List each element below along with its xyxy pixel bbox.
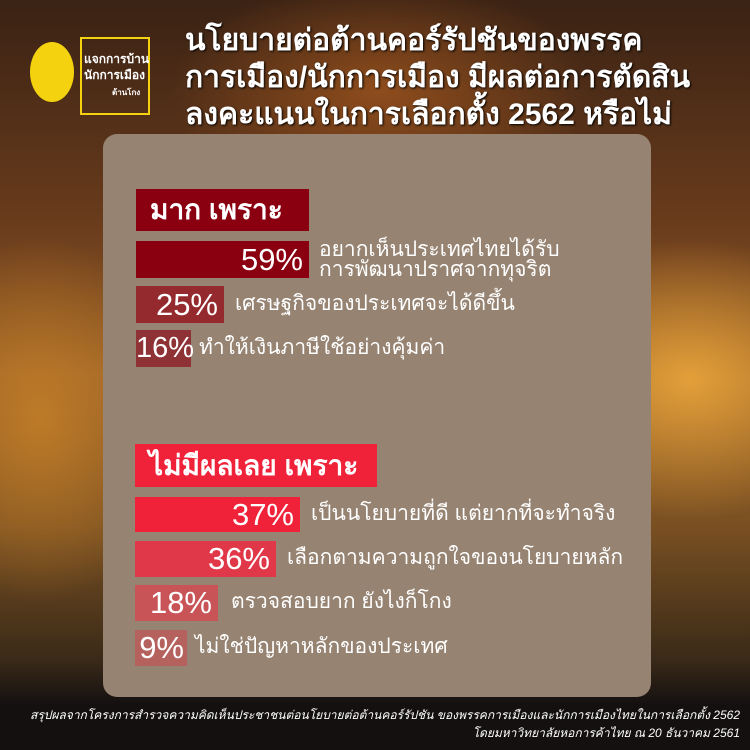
- footer source: [30, 706, 740, 740]
- icon: megaphone circle: [30, 42, 74, 102]
- label 16%: ทำให้เงินภาษีใช้อย่างคุ้มค่า: [199, 336, 445, 359]
- title: นโยบายต่อต้านคอร์รัปชันของพรรค: [185, 24, 642, 57]
- panel: [103, 134, 651, 697]
- bar 59%: [136, 241, 309, 278]
- label 59%: การพัฒนาปราศจากทุจริต: [319, 258, 551, 281]
- bar 25%: 25%: [156, 287, 218, 322]
- heading: มาก เพราะ: [136, 189, 309, 231]
- label 37%: เป็นนโยบายที่ดี แต่ยากที่จะทำจริง: [311, 502, 615, 525]
- footer source: โดยมหาวิทยาลัยหอการค้าไทย ณ 20 ธันวาคม 2561: [473, 726, 740, 740]
- bar 25%: [136, 286, 224, 323]
- heading: มาก เพราะ: มาก เพราะ: [150, 194, 283, 225]
- bar 16%: 16%: [136, 332, 194, 364]
- logo text: [80, 37, 150, 115]
- title: ลงคะแนนในการเลือกตั้ง 2562 หรือไม่: [185, 98, 672, 131]
- bar 59%: 59%: [241, 242, 303, 277]
- label 36%: เลือกตามความถูกใจของนโยบายหลัก: [287, 546, 623, 569]
- logo: [30, 37, 150, 115]
- label 25%: เศรษฐกิจของประเทศจะได้ดีขึ้น: [235, 292, 515, 315]
- logo text: นักการเมือง: [84, 68, 145, 82]
- bar 37%: [135, 497, 300, 532]
- bar 18%: 18%: [150, 585, 212, 620]
- label 59%: [319, 236, 560, 282]
- footer source: สรุปผลจากโครงการสำรวจความคิดเห็นประชาชนต่อนโยบายต่อต้านคอร์รัปชัน ของพรรคการเมืองและนักการเมืองไทยในการเลือกตั้ง 2562: [30, 708, 740, 722]
- logo text: ต้านโกง: [112, 88, 140, 97]
- title: [185, 22, 692, 131]
- label 59%: อยากเห็นประเทศไทยได้รับ: [319, 238, 560, 261]
- heading: ไม่มีผลเลย เพราะ: [135, 444, 377, 487]
- bar 37%: 37%: [232, 497, 294, 532]
- logo text: แจกการบ้าน: [84, 52, 149, 66]
- bar 36%: 36%: [208, 541, 270, 576]
- title: การเมือง/นักการเมือง มีผลต่อการตัดสิน: [185, 61, 690, 94]
- label 18%: ตรวจสอบยาก ยังไงก็โกง: [231, 590, 452, 613]
- bar 9%: 9%: [139, 630, 184, 665]
- label 9%: ไม่ใช่ปัญหาหลักของประเทศ: [195, 635, 448, 658]
- bar 36%: [135, 541, 276, 577]
- heading: ไม่มีผลเลย เพราะ: ไม่มีผลเลย เพราะ: [149, 450, 358, 481]
